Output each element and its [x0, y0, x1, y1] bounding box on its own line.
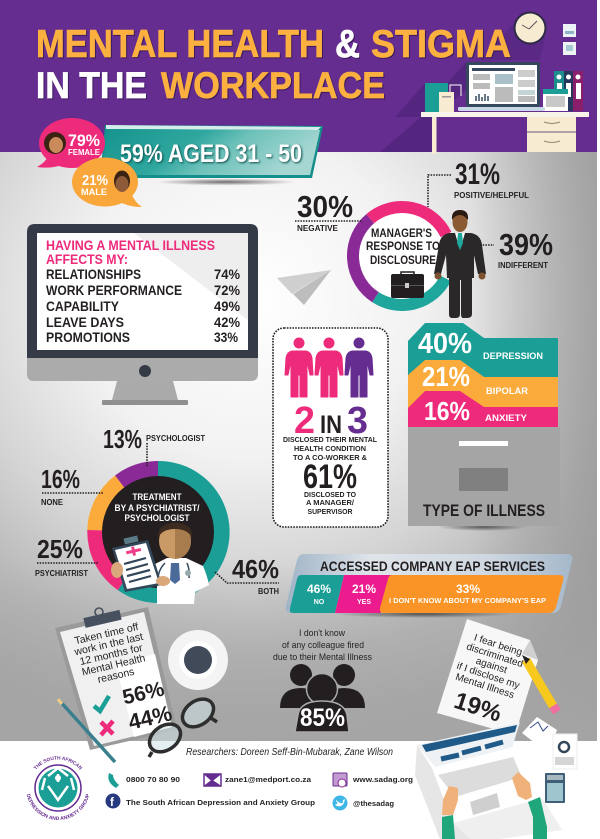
- text: Mental Illness: [454, 672, 515, 701]
- segment: unknown: [380, 575, 564, 613]
- icon: yellow pencil: [522, 655, 557, 712]
- label: 13% psychologist: [103, 424, 205, 467]
- header band: [0, 0, 597, 152]
- label: 46% both: 46%: [232, 554, 279, 584]
- stat: 19%: 19%: [451, 687, 505, 728]
- label: 13% psychologist: PSYCHOLOGIST: [146, 434, 205, 443]
- bubble: male: MALE: [81, 187, 107, 197]
- segment: yes: 21%: [352, 582, 376, 596]
- text: 12 months for: [79, 642, 144, 668]
- bubble: female: [37, 118, 105, 168]
- row: bipolar: [422, 361, 528, 397]
- text: manager disclosure: DISCLOSED TO: [304, 490, 356, 499]
- donut heading: BY A PSYCHIATRIST/: [114, 503, 200, 513]
- contact: phone: [108, 773, 180, 788]
- label: 46% both: [215, 554, 279, 596]
- icon: briefcase: [391, 272, 424, 298]
- table: effects: 33%: [214, 329, 238, 345]
- segment: no: [290, 575, 344, 613]
- bubble: female: FEMALE: [68, 147, 100, 157]
- row: depression: [418, 328, 543, 362]
- icon: manager figure: [434, 210, 486, 318]
- binders: [554, 71, 583, 111]
- stat: 61%: 61%: [303, 458, 357, 496]
- contact: facebook: The South African Depression and Anxiety Group: [126, 798, 315, 807]
- text: due to their Mental Illness: [273, 652, 372, 663]
- logo: DEPRESSION AND ANXIETY GROUP: [26, 794, 89, 820]
- panel: monitor: [27, 224, 258, 405]
- row: bipolar: BIPOLAR: [486, 386, 528, 397]
- stat: 2 in 3: 2: [294, 400, 315, 442]
- contact: twitter: @thesadag: [353, 799, 394, 808]
- logo: THE SOUTH AFRICAN: [34, 756, 82, 770]
- note: fear of discrimination: [437, 619, 538, 735]
- text: [70, 620, 152, 690]
- text: against: [474, 656, 509, 676]
- label: 31% positive: 31%: [455, 158, 500, 191]
- title: &: [335, 23, 360, 66]
- table: effects: CAPABILITY: [46, 298, 120, 314]
- text: co-worker disclosure: [283, 435, 377, 462]
- label: 25% psychiatrist: [35, 534, 99, 578]
- label: 31% positive: [428, 158, 529, 207]
- stat: 2 in 3: [294, 400, 368, 442]
- contact: website: [333, 773, 413, 787]
- heading: HAVING A MENTAL ILLNESS: [46, 237, 215, 253]
- icon: cross: [101, 721, 113, 735]
- contact: facebook: [106, 794, 315, 809]
- chart: manager's response ring: DISCLOSURE: [370, 255, 436, 267]
- chart: manager's response ring: [353, 207, 486, 318]
- row: depression: 40%: [418, 328, 472, 360]
- stat: 56%: 56%: [120, 677, 167, 709]
- label: 25% psychiatrist: 25%: [37, 534, 83, 564]
- text: Mental Health: [81, 652, 147, 679]
- row: anxiety: [424, 396, 528, 426]
- panel: company EAP services: [286, 554, 572, 618]
- icon: wall clock: [514, 12, 546, 44]
- label: 46% both: BOTH: [258, 587, 279, 596]
- text: Taken time off: [73, 621, 140, 647]
- text: [273, 628, 372, 663]
- stat: 2 in 3: 3: [347, 400, 368, 442]
- stat: 44%: 44%: [126, 700, 174, 735]
- text: manager disclosure: SUPERVISOR: [308, 507, 353, 516]
- icon: group of people: [280, 664, 365, 732]
- panel: 2 in 3 disclosure: [273, 328, 388, 527]
- contact: twitter: [332, 796, 394, 810]
- title: [36, 23, 511, 106]
- illustration: laptop and hands: [415, 717, 577, 839]
- footer: Researchers: Doreen Seff-Bin-Mubarak, Zane Wilson: [186, 747, 393, 758]
- contact: website: www.sadag.org: [352, 775, 413, 784]
- calendar: [543, 89, 568, 111]
- panel: colleague fired: [273, 628, 372, 732]
- label: 39% indifferent: [480, 227, 553, 270]
- text: work in the last: [72, 631, 144, 658]
- table: effects: 72%: [214, 282, 241, 298]
- label: 30% negative: NEGATIVE: [297, 224, 339, 233]
- chart: treatment donut: [87, 461, 230, 604]
- segment: yes: YES: [357, 599, 371, 606]
- panel: age banner: [100, 125, 323, 186]
- stat: 85%: 85%: [300, 704, 345, 732]
- icon: tick: [94, 696, 109, 711]
- label: 13% psychologist: 13%: [103, 424, 142, 454]
- table: effects: RELATIONSHIPS: [46, 266, 141, 282]
- donut heading: [114, 492, 200, 523]
- text: manager disclosure: A MANAGER/: [306, 498, 355, 507]
- label: 31% positive: POSITIVE/HELPFUL: [454, 191, 529, 200]
- icon: wall frames: [563, 24, 576, 55]
- label: 16% none: [41, 464, 103, 507]
- row: anxiety: ANXIETY: [485, 413, 528, 424]
- text: reasons: [96, 666, 136, 686]
- title: WORKPLACE: [161, 65, 385, 106]
- hands: [442, 772, 547, 839]
- footer: [0, 741, 597, 820]
- label: 16% none: NONE: [41, 498, 64, 507]
- illustration: office desk: [380, 12, 589, 154]
- bubble: male: [72, 158, 142, 207]
- stat: 2 in 3: IN: [320, 411, 342, 439]
- label: TYPE OF ILLNESS: [423, 501, 545, 520]
- contact: facebook: f: [110, 797, 114, 809]
- table: effects: PROMOTIONS: [46, 329, 130, 345]
- text: of any colleague fired: [282, 640, 364, 651]
- text: [452, 630, 531, 702]
- bubble: female: 79%: [68, 131, 100, 150]
- icon: paper plane: [277, 270, 331, 305]
- donut heading: TREATMENT: [132, 492, 182, 502]
- donut heading: PSYCHOLOGIST: [124, 513, 190, 523]
- laptop: [458, 62, 545, 111]
- report page: [522, 717, 577, 769]
- label: 39% indifferent: INDIFFERENT: [498, 261, 548, 270]
- text: co-worker disclosure: TO A CO-WORKER &: [293, 453, 368, 462]
- contact: email: zane1@medport.co.za: [225, 775, 312, 784]
- text: co-worker disclosure: HEALTH CONDITION: [294, 444, 366, 453]
- bubble: male: 21%: [82, 172, 108, 189]
- contact: email: [204, 774, 312, 786]
- icon: glasses: [144, 693, 219, 758]
- segment: yes: [335, 575, 392, 613]
- table: effects: WORK PERFORMANCE: [46, 282, 182, 298]
- label: 30% negative: 30%: [297, 189, 353, 224]
- chart: manager's response ring: MANAGER'S: [371, 228, 432, 240]
- table: effects: [46, 266, 241, 345]
- label: 16% none: 16%: [41, 464, 80, 494]
- icon: doctor with clipboard: [111, 523, 209, 604]
- segment: unknown: I DON'T KNOW ABOUT MY COMPANY'S EAP: [389, 596, 546, 605]
- page edge: [597, 0, 600, 741]
- panel: clipboard note: [55, 607, 177, 750]
- table: effects: 42%: [214, 314, 241, 330]
- table: effects: 49%: [214, 298, 241, 314]
- segment: no: 46%: [307, 582, 331, 596]
- panel: type of illness file folder: [408, 323, 560, 531]
- label: 25% psychiatrist: PSYCHIATRIST: [35, 569, 88, 578]
- panel: age banner: 59% AGED 31 - 50: [120, 140, 302, 168]
- row: depression: DEPRESSION: [483, 351, 543, 362]
- text: if I disclose my: [455, 661, 521, 692]
- calculator: [545, 773, 565, 803]
- segment: unknown: 33%: [456, 582, 480, 596]
- table: effects: LEAVE DAYS: [46, 314, 124, 330]
- chart: manager's response ring: RESPONSE TO: [366, 241, 440, 253]
- text: co-worker disclosure: DISCLOSED THEIR MENTAL: [283, 435, 377, 444]
- desk: [421, 112, 589, 154]
- row: bipolar: 21%: [422, 361, 470, 392]
- table: effects: 74%: [214, 266, 241, 282]
- heading: AFFECTS MY:: [46, 251, 128, 267]
- icon: three people: [285, 338, 373, 397]
- title: IN THE: [36, 65, 147, 106]
- text: I don't know: [299, 628, 345, 639]
- segment: no: NO: [314, 599, 325, 606]
- title: STIGMA: [371, 23, 511, 66]
- text: I fear being: [472, 633, 523, 658]
- row: anxiety: 16%: [424, 396, 470, 426]
- notebook: [425, 83, 461, 112]
- text: manager disclosure: [304, 490, 356, 516]
- icon: pencil: [58, 699, 115, 762]
- label: 39% indifferent: 39%: [499, 227, 553, 262]
- contact: phone: 0800 70 80 90: [126, 775, 180, 784]
- icon: coffee cup: [168, 630, 228, 692]
- panel: company EAP services: ACCESSED COMPANY EAP SERVICES: [320, 559, 545, 574]
- title: MENTAL HEALTH: [36, 23, 324, 66]
- text: discriminated: [465, 641, 524, 670]
- logo: [26, 756, 89, 820]
- heading: [46, 237, 215, 267]
